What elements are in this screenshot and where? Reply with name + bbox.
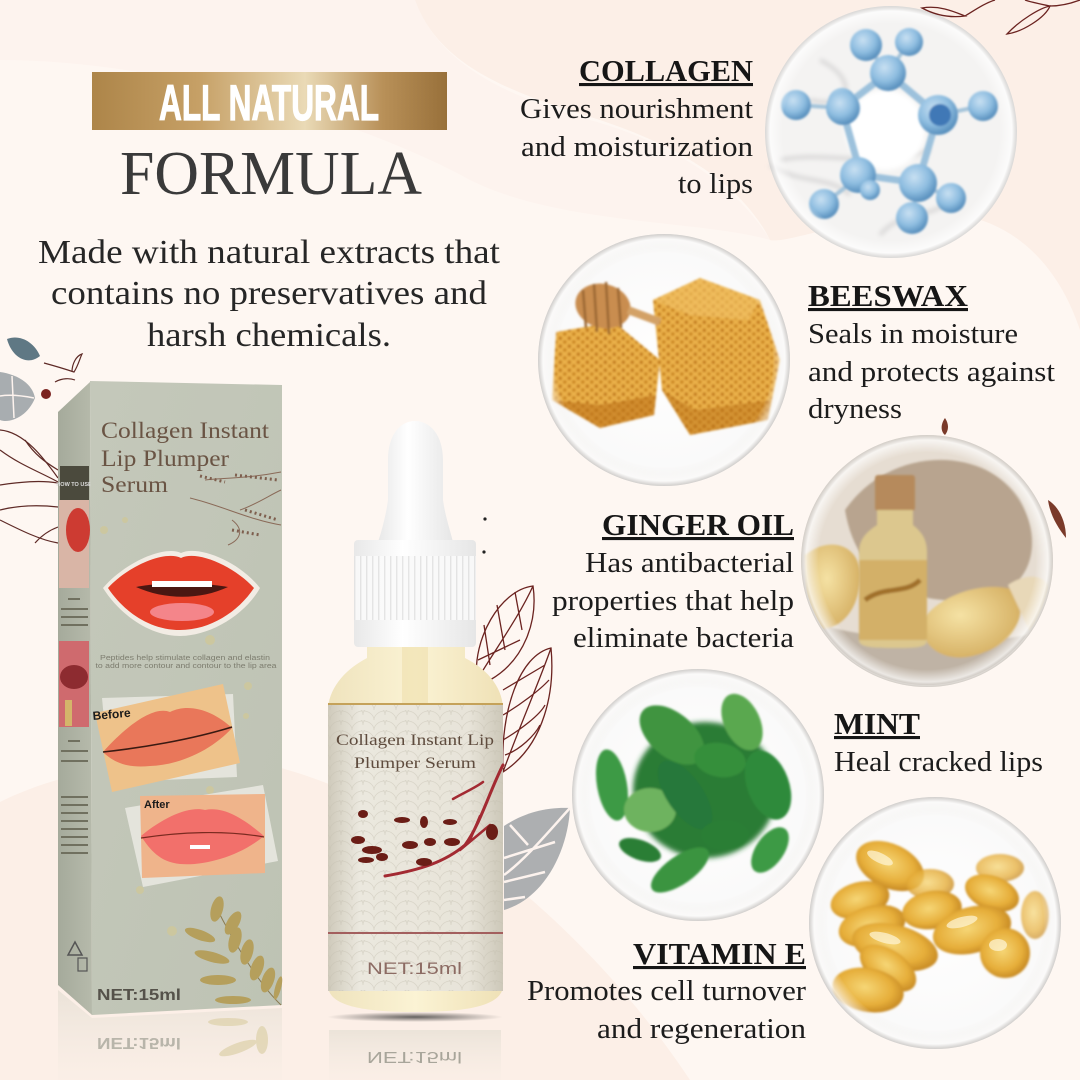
ginger sphere	[801, 435, 1053, 690]
beeswax text: Seals in moisture	[808, 318, 1018, 350]
before photo	[92, 684, 240, 792]
beeswax text: and protects against	[808, 356, 1055, 388]
mint text: Heal cracked lips	[834, 746, 1043, 778]
ginger oil text	[552, 507, 794, 654]
product box	[56, 381, 284, 1080]
box reflection	[58, 990, 282, 1080]
box small text: to add more contour and contour to the lip area	[96, 661, 277, 670]
box small text: Peptides help stimulate collagen and elastin	[100, 653, 270, 662]
vitamin e text: Promotes cell turnover	[527, 975, 806, 1007]
bottle label	[328, 703, 503, 991]
beeswax sphere	[538, 234, 790, 486]
box flecks	[100, 517, 252, 936]
ginger oil text: GINGER OIL	[602, 507, 794, 542]
vitamin e text: VITAMIN E	[633, 936, 806, 971]
box title	[101, 418, 270, 497]
net volume: NET:15ml	[97, 987, 181, 1004]
ingredient: collagen	[520, 0, 1080, 258]
beeswax text	[808, 278, 1055, 425]
beeswax text: dryness	[808, 393, 902, 425]
oil bottle	[859, 475, 927, 648]
banner: all natural	[92, 72, 447, 131]
box side panel	[56, 382, 92, 1015]
box lips	[103, 551, 260, 636]
box side panel: HOW TO USE	[56, 482, 92, 488]
decorative leaves left	[0, 338, 82, 543]
bottle label: NET:15ml	[367, 960, 462, 978]
ginger oil text: properties that help	[552, 585, 794, 617]
bottle	[327, 421, 503, 1080]
bottle label: Plumper Serum	[354, 755, 477, 772]
small brown leaves	[942, 418, 1066, 538]
box title: Serum	[101, 472, 168, 497]
bottle reflection: NET:15ml	[367, 1048, 462, 1065]
box front panel	[90, 381, 282, 1015]
ingredient: mint	[572, 669, 1043, 921]
bottle cap	[354, 540, 476, 647]
before photo: Before	[92, 706, 131, 723]
floor shadow	[327, 1012, 503, 1022]
collagen text	[520, 53, 754, 200]
box gold leaves	[183, 895, 284, 1005]
box small text	[96, 653, 277, 670]
after photo	[125, 785, 278, 887]
mint sphere	[572, 669, 824, 921]
banner: all natural: ALL NATURAL	[159, 75, 379, 131]
collagen sphere	[765, 6, 1017, 258]
intro paragraph: harsh chemicals.	[147, 317, 391, 354]
ingredient: vitamin e	[527, 797, 1061, 1049]
bottle label: Collagen Instant Lip	[336, 732, 494, 749]
leaf outlines behind bottle	[476, 586, 552, 772]
decorative twigs top right	[922, 0, 1080, 34]
ingredient: beeswax	[538, 234, 1055, 486]
collagen text: COLLAGEN	[579, 53, 753, 88]
intro paragraph	[38, 234, 501, 354]
title: formula: FORMULA	[120, 140, 422, 208]
vitamin e text	[527, 936, 807, 1045]
ginger oil text: eliminate bacteria	[573, 622, 794, 654]
beeswax text: BEESWAX	[808, 278, 969, 313]
collagen text: to lips	[678, 168, 753, 200]
vitamin e sphere	[809, 797, 1061, 1049]
collagen text: Gives nourishment	[520, 93, 753, 125]
vitamin e text: and regeneration	[597, 1013, 807, 1045]
box title: Collagen Instant	[101, 418, 270, 443]
bottle glass	[328, 640, 503, 1012]
box title: Lip Plumper	[101, 446, 229, 471]
ginger oil text: Has antibacterial	[585, 547, 794, 579]
ingredient: ginger oil	[552, 435, 1053, 690]
box branch	[190, 472, 281, 545]
intro paragraph: contains no preservatives and	[51, 275, 487, 312]
after photo: After	[144, 799, 170, 811]
grey leaf	[504, 808, 570, 910]
dots by bottle	[482, 517, 487, 554]
box reflection: NET:15ml	[97, 1034, 181, 1051]
dropper bulb	[378, 421, 453, 542]
mint text	[834, 706, 1043, 778]
collagen text: and moisturization	[521, 131, 754, 163]
intro paragraph: Made with natural extracts that	[38, 234, 501, 271]
mint text: MINT	[834, 706, 920, 741]
bottle reflection	[329, 1030, 501, 1080]
